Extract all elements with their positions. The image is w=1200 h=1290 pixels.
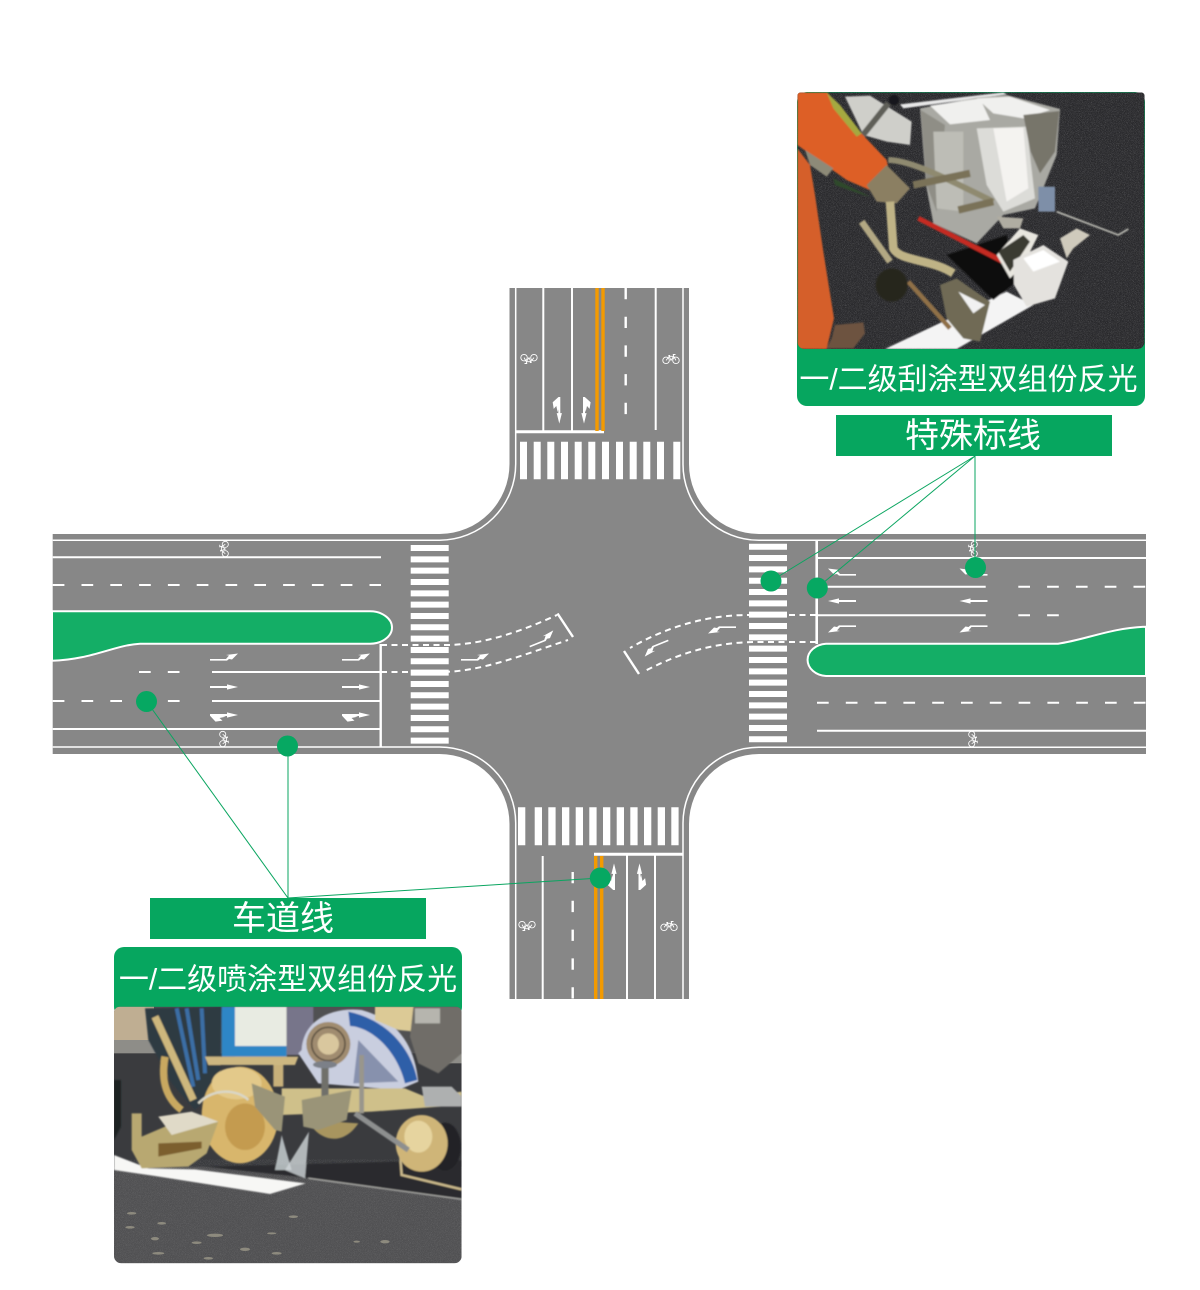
photo: scraper machine [797, 92, 1145, 349]
banner: lane lines: 车道线 [232, 900, 334, 938]
right road markings [817, 540, 1146, 731]
photo caption: 一/二级刮涂型双组份反光 [799, 364, 1138, 396]
photo panel: spray-type marking machine [114, 947, 462, 1263]
bicycle symbols [220, 354, 977, 931]
road surface [53, 288, 1146, 999]
photo: sprayer machine [114, 1007, 462, 1263]
road edge lines [53, 288, 1146, 999]
callout: special marking leader lines [760, 456, 986, 598]
lane arrows [210, 397, 988, 890]
crosswalks [518, 442, 680, 845]
top road markings [516, 288, 656, 432]
photo caption: 一/二级喷涂型双组份反光 [119, 964, 457, 996]
banner: special markings [836, 415, 1112, 456]
photo panel: scraping-type marking machine [797, 92, 1145, 406]
green islands [52, 611, 1146, 676]
road intersection [52, 288, 1146, 999]
banner: special markings: 特殊标线 [905, 417, 1041, 455]
callout: lane marking leader lines [136, 691, 611, 898]
banner: lane lines [150, 898, 426, 939]
left road markings [53, 557, 381, 747]
center turning guide lines [381, 614, 816, 674]
bottom road markings [543, 854, 683, 999]
